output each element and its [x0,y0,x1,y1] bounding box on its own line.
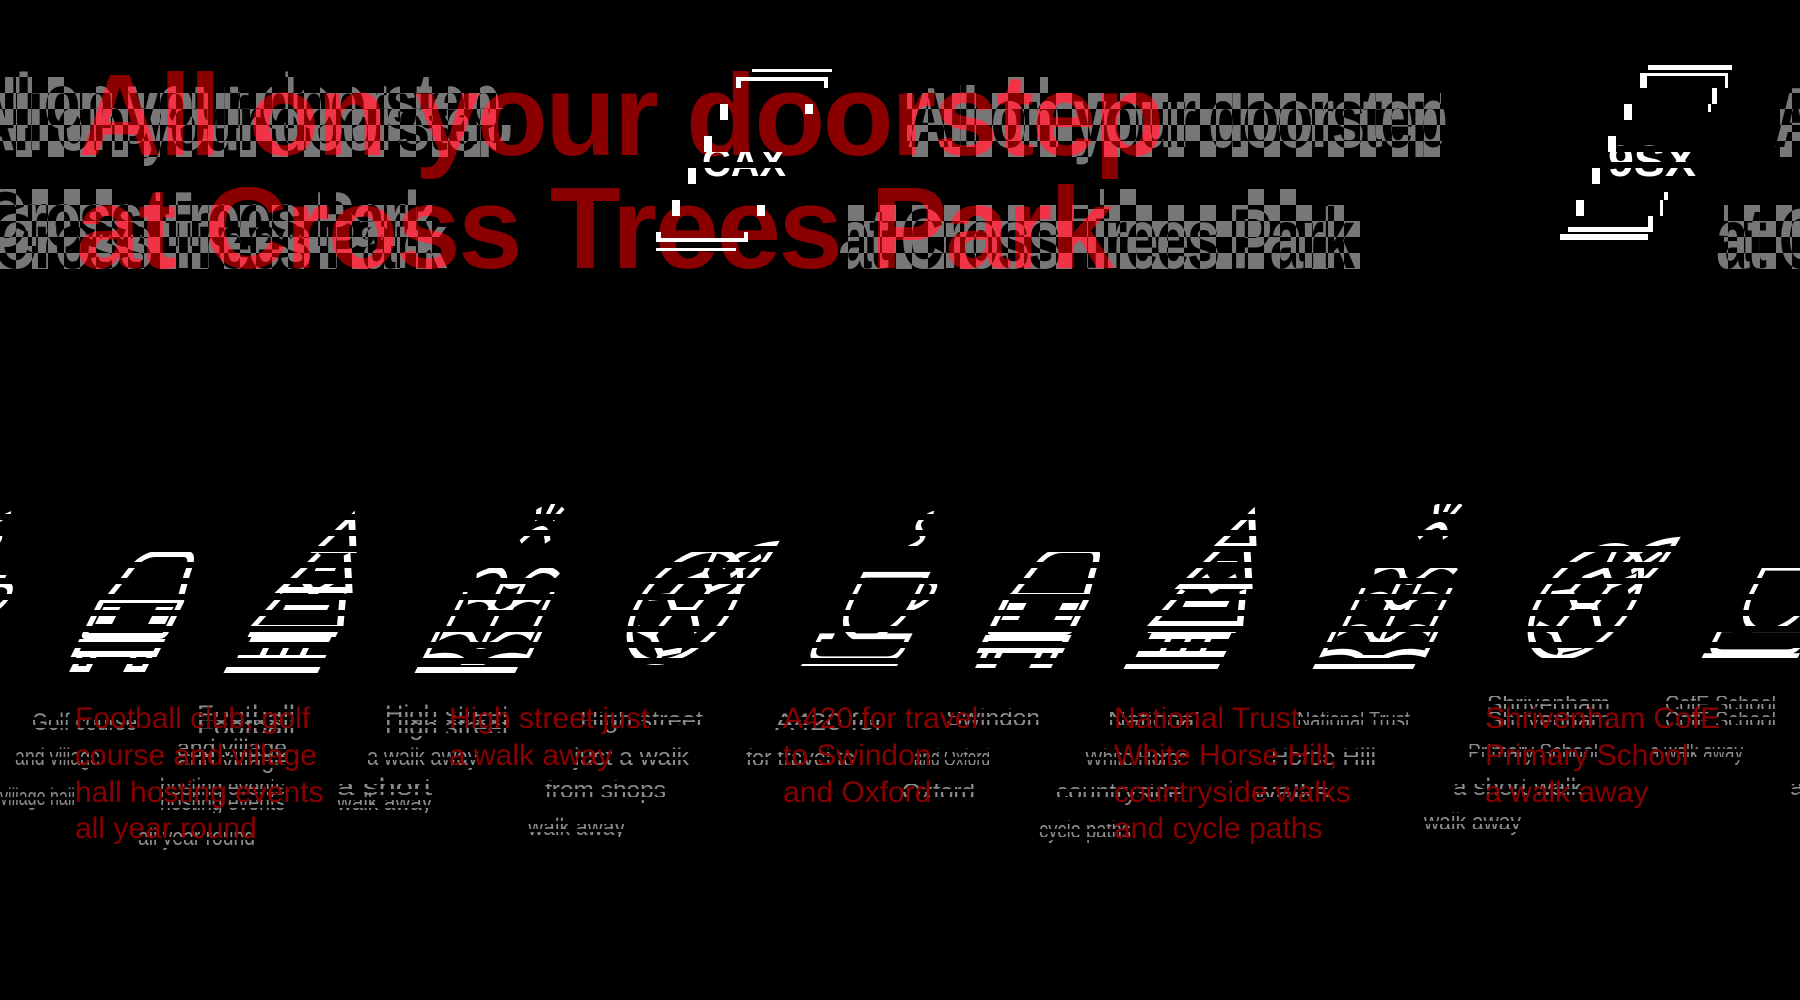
icon: ball and leaf [608,544,775,664]
badge text: 9SX [1608,137,1696,186]
caption: football club: course and village [75,739,317,772]
ghost captions in grey: Horse Hill [1271,744,1376,771]
title highlight where ghost text overlaps [80,79,1160,269]
ghost captions in grey: Football [197,701,295,728]
ghost captions in grey: walks [1253,779,1330,806]
ghost captions in grey: Primary School [1468,739,1598,766]
ghost captions in grey: countryside [1056,779,1182,806]
caption: Shrivenham school: a walk away [1485,776,1648,809]
caption: National Trust: and cycle paths [1114,812,1322,845]
badge text: CAX [702,141,786,185]
caption: Shrivenham school [1485,702,1720,809]
ghost captions in grey: High street [385,701,509,728]
icon: book second [1312,504,1462,669]
caption: football club: Football club, golf [75,702,311,735]
ghost captions in grey: and village [177,735,287,762]
caption: high street: High street just [449,702,650,735]
caption: A420 [783,702,978,809]
caption: high street [449,702,650,772]
icon row [0,498,1800,670]
ghost captions in grey [0,691,1800,851]
icon: cup second [1702,568,1800,658]
ghost captions in grey: High street [580,707,703,734]
ghost captions in grey: Golf course [32,709,137,736]
ghost captions in grey: a walk away [1650,739,1743,766]
caption: football club: all year round [75,812,257,845]
ghost captions in grey: Oxford [902,779,975,806]
heading text base: All on your doorstep [78,50,1162,180]
caption: National Trust: countryside walks [1114,776,1351,809]
caption: National Trust [1114,702,1351,845]
icon: cup [801,510,938,666]
caption: National Trust: White Horse Hill, [1114,739,1337,772]
ghost captions in grey: from shops [545,777,666,804]
ghost captions in grey: National Trust [1297,707,1410,734]
caption: football club: hall hosting events [75,776,324,809]
icon: tree [224,510,357,673]
ghost captions in grey: a walk away [367,744,478,771]
ghost letterforms: at Cross Trees Park [838,190,1356,287]
ghost captions in grey: cycle paths [1039,817,1131,844]
caption: Shrivenham school: Primary School [1485,739,1688,772]
ghost captions in grey: walk away [527,814,625,841]
caption: National Trust: National Trust [1114,702,1300,735]
ghost captions in grey: a short walk [1453,774,1584,801]
ghost captions in grey: White Horse [1085,745,1188,772]
caption: A420: and Oxford [783,776,931,809]
badge icon: second sheared box [1560,65,1732,240]
ghost captions in grey: just a walk [573,744,690,771]
ghost letterforms [0,72,1800,269]
caption: football club [75,702,324,845]
ghost captions in grey: CofE School [1665,691,1776,718]
ghost captions in grey: Shrivenham [1487,691,1610,718]
heading text bright overlap: All on your doorstep [78,50,1162,180]
ghost captions in grey: Shrivenham [1487,707,1610,734]
icon: book [414,504,564,673]
heading text base: at Cross Trees Park [76,163,1115,293]
ghost captions in grey: hosting events [160,789,285,816]
ghost captions in grey: village hall [0,784,75,811]
caption: A420: to Swindon [783,739,931,772]
ghost captions in grey: and village [15,744,100,771]
caption: A420: A420 for travel [783,702,978,735]
icon: partial cup left edge [0,511,13,609]
ghost captions in grey: National [1108,707,1200,734]
icon: car [68,554,205,669]
ghost captions in grey: Football [197,714,295,741]
ghost captions in grey: and village [177,747,287,774]
ghost marquee: repeated heading text in grey [0,72,1800,269]
ghost captions in grey: a short [337,774,432,801]
ghost captions in grey: High street [385,714,509,741]
ghost mosaic blocks [0,77,1800,269]
icon: tree second [1124,506,1256,669]
icon: ball and leaf second [1509,540,1676,660]
ghost captions in grey: all year round [138,824,255,851]
badge icon: first sheared box [656,69,832,251]
ghost captions in grey: CofE School [1665,707,1776,734]
heading text bright overlap: at Cross Trees Park [76,163,1115,293]
caption: high street: a walk away [449,739,612,772]
ghost captions in grey: hosting events [160,774,285,801]
ghost captions in grey: for travel to [746,745,855,772]
ghost captions in grey: walk away [1423,809,1521,836]
ghost captions in grey: and Oxford [914,745,990,772]
ghost captions in grey: Swindon [946,705,1040,732]
ghost letterforms: All on your doorstep [907,69,1446,166]
ghost captions in grey: A420 for [775,709,884,736]
title: main heading [76,50,1162,293]
caption: Shrivenham school: Shrivenham CofE [1485,702,1720,735]
icon: car second [974,550,1111,665]
ghost captions in grey: walk away [336,789,432,816]
